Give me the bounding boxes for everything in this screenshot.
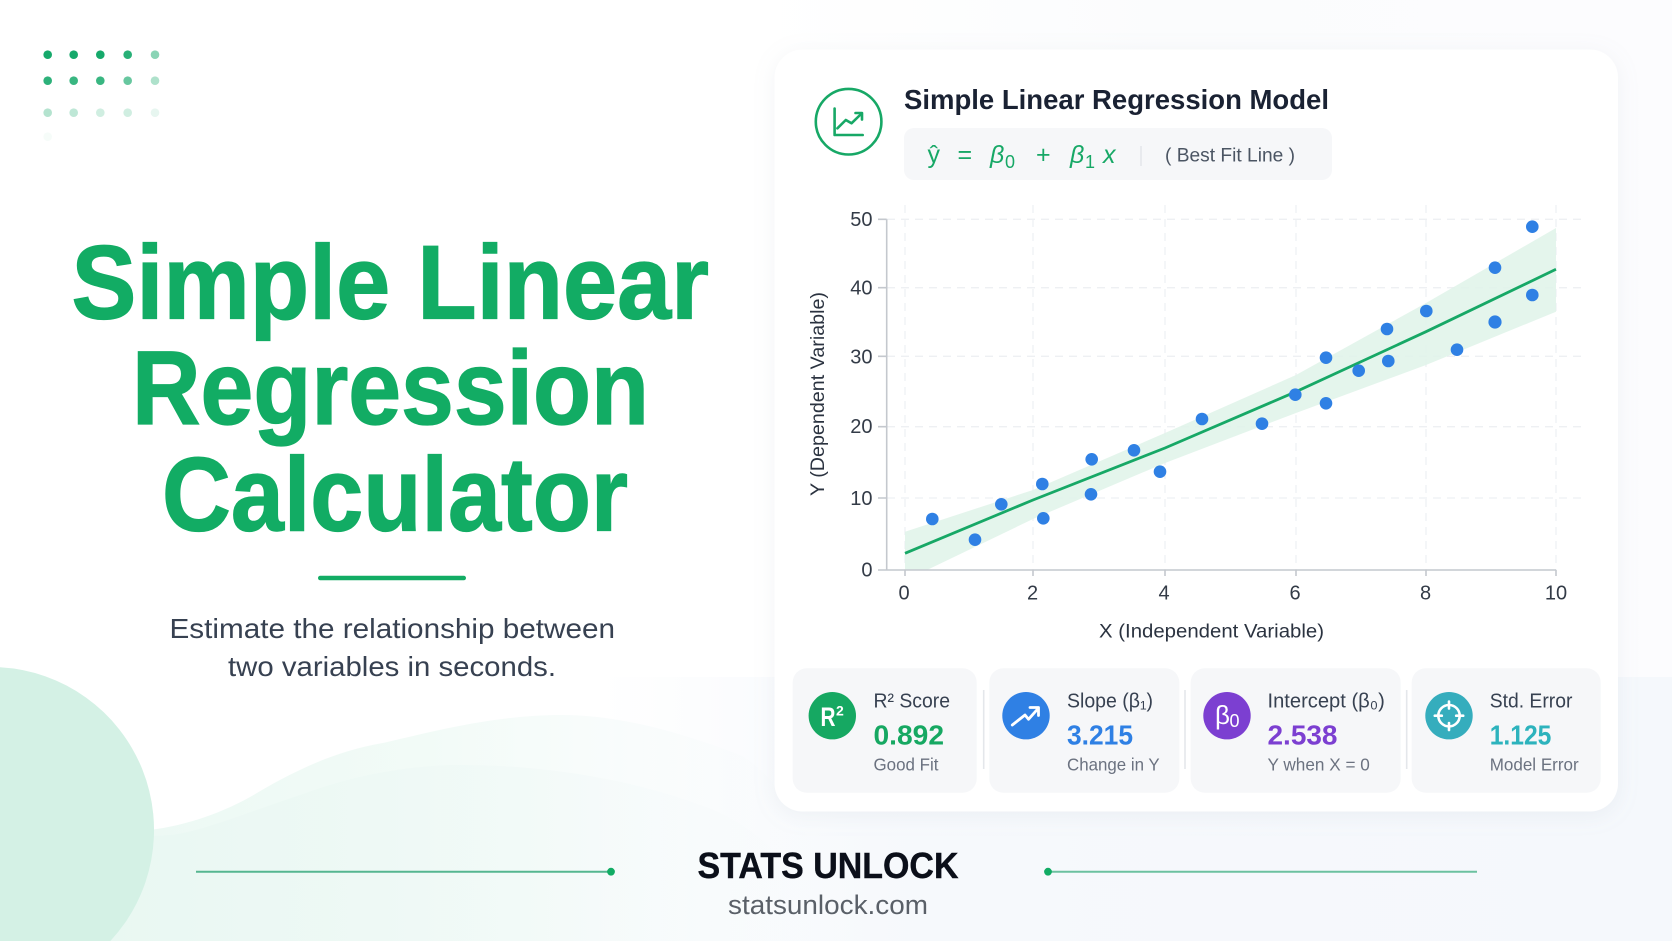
formula box: ŷ <box>928 141 940 169</box>
data points <box>926 220 1539 546</box>
y axis tick labels: 0 <box>861 560 872 582</box>
x axis tick labels: 8 <box>1420 582 1431 604</box>
background waves <box>0 715 850 941</box>
title: Simple Linear <box>72 224 709 341</box>
icon: beta zero: β <box>1215 700 1230 730</box>
stat: intercept: Intercept (β₀) <box>1268 690 1385 712</box>
title underline <box>318 576 466 580</box>
icon: R squared: 2 <box>836 702 844 718</box>
formula box: 0 <box>1005 152 1015 172</box>
stat: standard error: 1.125 <box>1490 719 1551 750</box>
dot grid decoration <box>43 50 159 141</box>
icon: R squared <box>809 692 856 739</box>
icon: R squared: R <box>820 702 836 732</box>
subtitle: two variables in seconds. <box>228 651 556 682</box>
stat: slope: Change in Y <box>1067 755 1160 775</box>
formula box: ( Best Fit Line ) <box>1165 146 1295 166</box>
stat: R2 score: Good Fit <box>874 755 939 775</box>
regression line <box>905 269 1556 553</box>
formula box: = <box>958 141 972 169</box>
x axis tick labels: 4 <box>1158 582 1170 604</box>
panel: regression model card <box>774 50 1618 812</box>
formula box: x <box>1102 141 1117 169</box>
stat: standard error: Std. Error <box>1490 690 1573 712</box>
x axis tick labels: 6 <box>1289 582 1301 604</box>
formula box <box>904 128 1332 180</box>
formula box: β <box>1069 141 1084 169</box>
formula box: 1 <box>1085 152 1095 172</box>
stat: R2 score <box>793 668 977 793</box>
subtitle: Estimate the relationship between <box>170 613 615 644</box>
stat: intercept <box>1191 668 1401 793</box>
footer url: statsunlock.com <box>728 890 928 920</box>
x axis tick labels: 2 <box>1027 582 1038 604</box>
confidence band <box>905 228 1556 570</box>
stat: R2 score: 0.892 <box>874 719 944 750</box>
icon: line chart in circle <box>816 89 881 154</box>
x axis tick labels <box>898 582 1567 604</box>
x axis tick labels: 0 <box>898 582 910 604</box>
footer left rule <box>196 868 615 876</box>
y axis tick labels: 20 <box>850 416 872 438</box>
icon: beta zero: 0 <box>1230 711 1240 731</box>
footer brand: STATS UNLOCK <box>698 845 958 886</box>
subtitle <box>170 613 615 682</box>
title <box>72 224 709 554</box>
icon: beta zero <box>1203 692 1251 739</box>
decorative circle bottom left <box>0 667 154 941</box>
card heading: Simple Linear Regression Model <box>904 84 1329 115</box>
title: Calculator <box>162 437 628 554</box>
y axis tick labels: 40 <box>850 278 872 300</box>
y axis tick labels: 30 <box>850 346 872 368</box>
y axis title: Y (Dependent Variable) <box>807 292 829 496</box>
icon: crosshair <box>1425 692 1473 739</box>
icon: trend arrow <box>1002 692 1050 739</box>
stat: standard error: Model Error <box>1490 755 1579 775</box>
stat: R2 score: R² Score <box>874 690 950 712</box>
x axis title: X (Independent Variable) <box>1099 620 1324 642</box>
y axis tick labels <box>850 209 872 582</box>
footer right rule <box>1044 868 1477 876</box>
stat: intercept: Y when X = 0 <box>1268 755 1370 775</box>
stat: standard error <box>1412 668 1601 793</box>
stat: slope <box>989 668 1179 793</box>
y axis tick labels: 10 <box>850 488 872 510</box>
formula box: + <box>1036 141 1051 169</box>
formula box: β <box>989 141 1004 169</box>
stat: slope: 3.215 <box>1067 719 1133 750</box>
title: Regression <box>132 330 649 447</box>
stat: slope: Slope (β₁) <box>1067 690 1153 712</box>
x axis tick labels: 10 <box>1545 582 1567 604</box>
y axis tick labels: 50 <box>850 209 872 231</box>
scatter chart <box>807 205 1582 642</box>
stat: intercept: 2.538 <box>1268 719 1338 750</box>
